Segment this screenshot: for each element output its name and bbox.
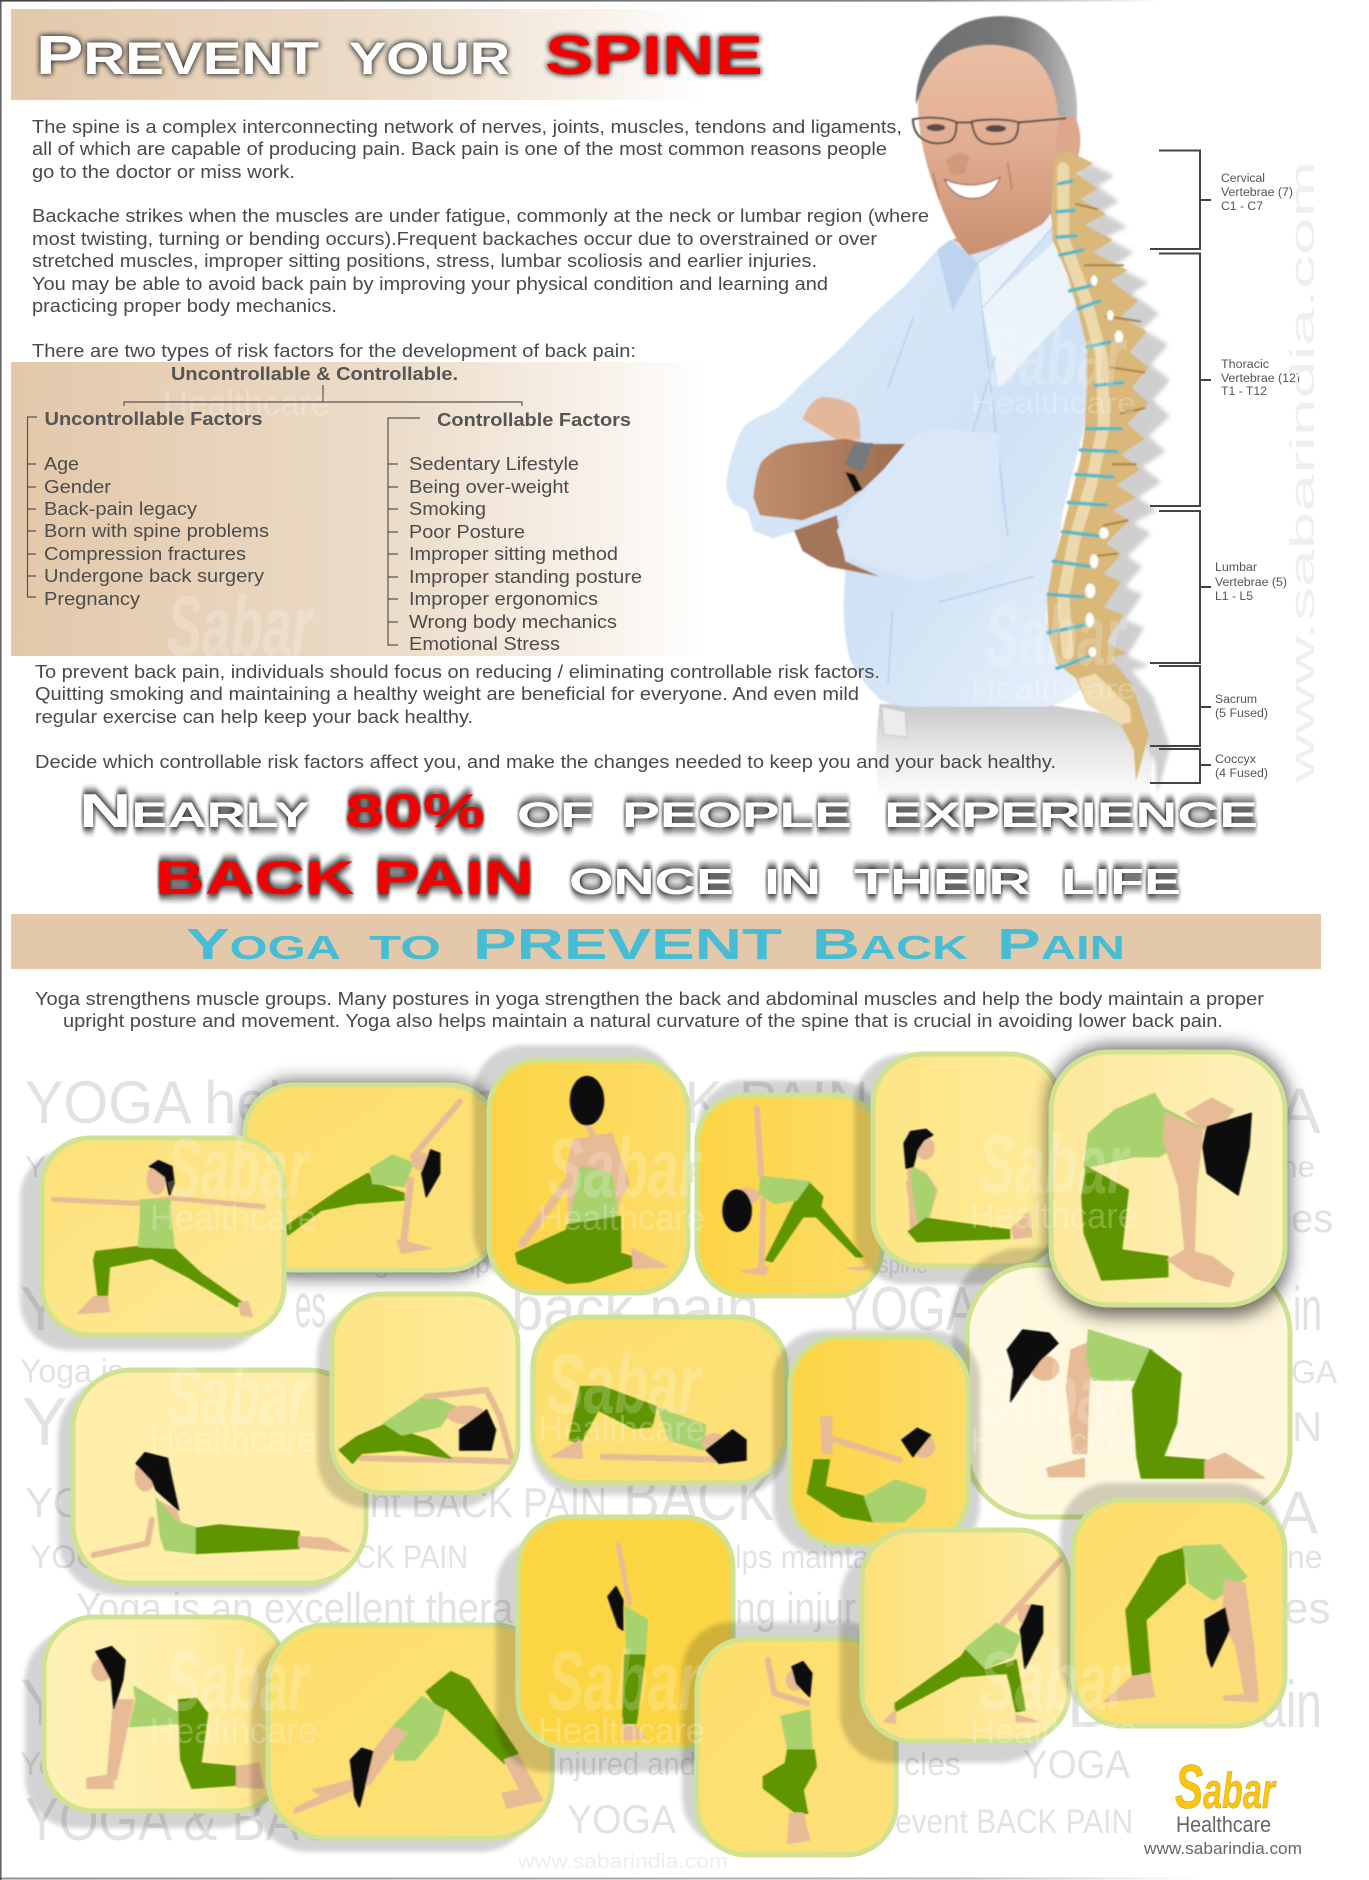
card watermarks: Healthcare (538, 1710, 705, 1751)
column: controllable factors (388, 409, 642, 654)
column: controllable factors: Poor Posture (409, 521, 525, 542)
card watermarks: Sabar (547, 1634, 703, 1728)
column: controllable factors: Wrong body mechanics (409, 611, 617, 632)
column: controllable factors: Improper ergonomics (409, 588, 598, 609)
card watermarks: Healthcare (150, 1419, 317, 1460)
card: warrior pose (20, 1138, 284, 1350)
card: cobra pose (58, 1370, 366, 1595)
card watermarks: Sabar (167, 1121, 311, 1215)
title band (11, 9, 763, 100)
figure: bow (807, 1417, 934, 1522)
banner: nearly 80 percent: N EARLY (79, 784, 310, 837)
background watermark text: YOGA & BACK (25, 1786, 370, 1853)
spine labels: Sacrum (1215, 694, 1257, 706)
yoga description: upright posture and movement. Yoga also helps maintain a natural curvature of the spine that is crucial in avoiding lower back pain. (63, 1011, 1223, 1031)
spine labels: C1 - C7 (1221, 201, 1263, 213)
column: uncontrollable factors (28, 408, 269, 609)
card: seated staff pose (854, 1054, 1060, 1284)
card watermarks: Healthcare (538, 1408, 705, 1449)
title: prevent your spine: SPINE (545, 24, 763, 86)
card: extended angle pose (243, 1081, 499, 1277)
watermark over man (971, 309, 1136, 706)
photo: spine model (1047, 151, 1170, 793)
watermark over man: Sabar (985, 309, 1128, 403)
panel: risk factors (11, 362, 705, 673)
background watermark text: ne (1287, 1539, 1323, 1575)
card watermarks: Sabar (167, 1349, 311, 1443)
band: yoga to prevent back pain (11, 914, 1321, 969)
card: bow pose (773, 1330, 980, 1555)
figure: wheel (1104, 1545, 1258, 1702)
yoga description (35, 989, 1264, 1031)
figure: side stretch (884, 1560, 1060, 1723)
spine labels: Vertebrae (12) (1221, 373, 1300, 385)
banner: nearly 80 percent: PEOPLE (622, 796, 852, 835)
yoga description: Yoga strengthens muscle groups. Many postures in yoga strengthen the back and abdominal muscles and help the body maintain a proper (35, 989, 1264, 1009)
background watermark text: YOGA (1023, 1743, 1130, 1787)
banner: nearly 80 percent: 80% (345, 784, 485, 837)
background watermark text: Regular help (340, 1252, 490, 1279)
background watermark text: A (1278, 1479, 1318, 1546)
watermark over man: Sabar (985, 589, 1128, 683)
column: uncontrollable factors: Undergone back surgery (44, 565, 265, 586)
spine labels: (4 Fused) (1215, 768, 1268, 780)
column: uncontrollable factors: Compression fractures (44, 543, 246, 564)
spine labels: L1 - L5 (1215, 591, 1253, 603)
column: controllable factors: Sedentary Lifestyle (409, 453, 579, 474)
figure: table (87, 1647, 263, 1788)
background watermark text: www.sabarindia.com (517, 1851, 728, 1873)
card: bridge pose (531, 1317, 788, 1495)
column: uncontrollable factors: Uncontrollable Factors (44, 408, 262, 429)
band: yoga to prevent back pain: Y OGA (186, 920, 341, 969)
title: prevent your spine: PREVENT (36, 24, 319, 86)
title: prevent your spine: YOUR (349, 33, 510, 84)
intro text: stretched muscles, improper sitting positions, stress, lumbar scoliosis and earlier injuries. (32, 251, 817, 271)
background watermark text: BACK (623, 1459, 774, 1535)
spine labels: Coccyx (1215, 754, 1256, 766)
band: yoga to prevent back pain: TO (369, 929, 441, 966)
card: side angle stretch pose (840, 1530, 1069, 1763)
card watermarks: Sabar (167, 1634, 311, 1728)
background watermark text: YOGA (567, 1798, 676, 1842)
column: controllable factors: Improper standing posture (409, 566, 642, 587)
background watermark text: N (1292, 1403, 1322, 1450)
background watermark text: Yoga helps maintain a natural curvature of the spine maintain a natural curvature of the spine (25, 1151, 1315, 1184)
card: cat pose (952, 1248, 1290, 1517)
card: seated twist pose (473, 1045, 688, 1293)
card watermarks: Healthcare (970, 1420, 1137, 1461)
figure: triangle (723, 1108, 869, 1275)
background watermark text: GA (1291, 1354, 1338, 1390)
title: prevent your spine (36, 24, 763, 86)
watermark over man: Healthcare (971, 387, 1136, 420)
banner: nearly 80 percent: EXPERIENCE (884, 796, 1258, 835)
band: yoga to prevent back pain: PREVENT (473, 920, 782, 969)
prevention text: To prevent back pain, individuals should focus on reducing / eliminating controllable risk factors. (35, 662, 880, 682)
column: uncontrollable factors: Pregnancy (44, 588, 141, 609)
logo: sabar healthcare: www.sabarindia.com (1143, 1839, 1302, 1858)
card: reclined twist pose (317, 1294, 518, 1508)
banner: nearly 80 percent: ONCE (569, 861, 734, 902)
background watermark text: YOGA helps prevent BACK PAIN (25, 1069, 869, 1136)
figure: seated twist (516, 1077, 667, 1283)
background watermark text: njured and (558, 1746, 696, 1782)
spine labels: Cervical (1221, 173, 1265, 185)
banner: nearly 80 percent: IN (764, 861, 821, 902)
banner: nearly 80 percent: OF (517, 796, 594, 835)
background watermark text: YOGA (838, 1275, 978, 1344)
figure: downward dog (295, 1672, 542, 1813)
background watermark text: A (1278, 1075, 1321, 1147)
figure: cat (1007, 1330, 1264, 1478)
column: controllable factors: Improper sitting method (409, 543, 618, 564)
background watermark text: Yoga is (20, 1353, 124, 1389)
intro text (32, 117, 929, 361)
banner: nearly 80 percent: THEIR (854, 861, 1031, 902)
background watermark text: ng injur (735, 1584, 856, 1633)
background watermark text (20, 1069, 1338, 1873)
figure: cobra (94, 1453, 350, 1555)
card watermarks: Sabar (979, 1347, 1131, 1441)
card: eagle pose (682, 1622, 896, 1855)
background watermark text: YOG (30, 1539, 101, 1575)
band: yoga to prevent back pain: B ACK (812, 920, 968, 969)
background watermark text: back pain (511, 1275, 759, 1344)
card: triangle pose (697, 1080, 884, 1296)
card watermarks: Sabar (547, 1337, 703, 1431)
spine labels: (5 Fused) (1215, 708, 1268, 720)
background watermark text: Yoga is an excellent thera (76, 1584, 513, 1633)
intro text: The spine is a complex interconnecting network of nerves, joints, muscles, tendons and ligaments, (32, 117, 902, 137)
figure: bridge (551, 1387, 746, 1463)
photo: man with arms crossed (726, 16, 1153, 800)
card watermarks: Healthcare (970, 1710, 1137, 1751)
figure: raised arms standing (608, 1545, 647, 1740)
spine labels: T1 - T12 (1221, 386, 1267, 398)
spine labels (1215, 173, 1300, 780)
card: table pose (25, 1617, 284, 1828)
intro text: There are two types of risk factors for the development of back pain: (32, 341, 636, 361)
column: uncontrollable factors: Age (44, 453, 79, 474)
background watermark text: in (1293, 1275, 1322, 1344)
logo: sabar healthcare: Healthcare (1176, 1812, 1271, 1837)
background watermark text: Yo (20, 1746, 56, 1782)
column: uncontrollable factors: Back-pain legacy (44, 498, 198, 519)
spine labels: Lumbar (1215, 562, 1257, 574)
intro text: Backache strikes when the muscles are under fatigue, commonly at the neck or lumbar region (where (32, 206, 929, 226)
background watermark text: CK PAIN (355, 1539, 468, 1575)
intro text: go to the doctor or miss work. (32, 162, 295, 182)
card: downward dog pose (251, 1625, 552, 1852)
band: yoga to prevent back pain: P AIN (997, 920, 1125, 969)
spine brackets (1150, 150, 1211, 783)
figure: extended angle (286, 1102, 460, 1253)
background watermark text: cles (904, 1746, 961, 1782)
figure: camel (1082, 1093, 1251, 1287)
background watermark text: es (1291, 1197, 1333, 1241)
card: wheel pose (1060, 1483, 1285, 1726)
background watermark text: spine (878, 1252, 928, 1279)
intro text: all of which are capable of producing pain. Back pain is one of the most common reasons people (32, 139, 887, 159)
banner: nearly 80 percent (79, 784, 1258, 904)
card watermarks: Sabar (979, 1117, 1131, 1211)
card watermarks (150, 1117, 1137, 1751)
logo: sabar healthcare (1143, 1753, 1302, 1858)
prevention text: Decide which controllable risk factors affect you, and make the changes needed to keep you and your back healthy. (35, 752, 1056, 772)
background watermark text: es (1284, 1584, 1330, 1633)
prevention text: regular exercise can help keep your back healthy. (35, 707, 473, 727)
background watermark text: B (1067, 1667, 1111, 1741)
card: mountain arms up pose (496, 1517, 733, 1772)
card watermarks: Healthcare (538, 1197, 705, 1238)
card: camel pose (1049, 1046, 1289, 1316)
logo: sabar healthcare: Sabar (1175, 1753, 1277, 1822)
prevention text (35, 662, 1056, 772)
column: controllable factors: Being over-weight (409, 476, 569, 497)
intro text: practicing proper body mechanics. (32, 296, 337, 316)
panel: risk factors: Sabar (167, 579, 315, 673)
banner: nearly 80 percent: LIFE (1061, 861, 1181, 902)
heading: uncontrollable and controllable: Uncontrollable & Controllable. (171, 363, 458, 384)
card watermarks: Healthcare (150, 1710, 317, 1751)
background watermark text: event BACK PAIN (895, 1803, 1133, 1841)
column: uncontrollable factors: Gender (44, 476, 111, 497)
background watermark text: Y (20, 1275, 61, 1344)
background watermark text: Y (20, 1665, 64, 1739)
figure: seated staff (904, 1129, 1032, 1242)
column: controllable factors: Emotional Stress (409, 633, 560, 654)
figure: head to knee twist (339, 1390, 511, 1463)
column: controllable factors: Controllable Factors (437, 409, 631, 430)
spine labels: Thoracic (1221, 359, 1269, 371)
card watermarks: Sabar (979, 1634, 1131, 1728)
spine labels: Vertebrae (7) (1221, 187, 1293, 199)
intro text: You may be able to avoid back pain by improving your physical condition and learning and (32, 274, 828, 294)
background watermark text: Y (22, 1384, 67, 1460)
panel: risk factors: Healthcare (163, 385, 330, 423)
card watermarks: Healthcare (970, 1195, 1137, 1236)
column: controllable factors: Smoking (409, 498, 486, 519)
figure: eagle (763, 1660, 816, 1843)
figure: warrior (54, 1161, 263, 1317)
spine labels: Vertebrae (5) (1215, 577, 1287, 589)
tree connector (124, 385, 522, 406)
column: uncontrollable factors: Born with spine problems (44, 520, 269, 541)
card watermarks: Healthcare (150, 1197, 317, 1238)
intro text: most twisting, turning or bending occurs).Frequent backaches occur due to overstrained or over (32, 229, 877, 249)
banner: nearly 80 percent: BACK PAIN (155, 851, 534, 904)
background watermark text: lps mainta (735, 1539, 869, 1575)
vertical website watermark: www.sabarindia.com (1284, 161, 1322, 785)
background watermark text: YO (25, 1479, 86, 1526)
background watermark text: es (295, 1272, 326, 1341)
card watermarks: Sabar (547, 1121, 703, 1215)
prevention text: Quitting smoking and maintaining a healthy weight are beneficial for everyone. And even mild (35, 684, 859, 704)
watermark over man: Healthcare (971, 673, 1136, 706)
background watermark text: nt BACK PAIN (370, 1479, 607, 1526)
background watermark text: ain (1260, 1667, 1322, 1741)
